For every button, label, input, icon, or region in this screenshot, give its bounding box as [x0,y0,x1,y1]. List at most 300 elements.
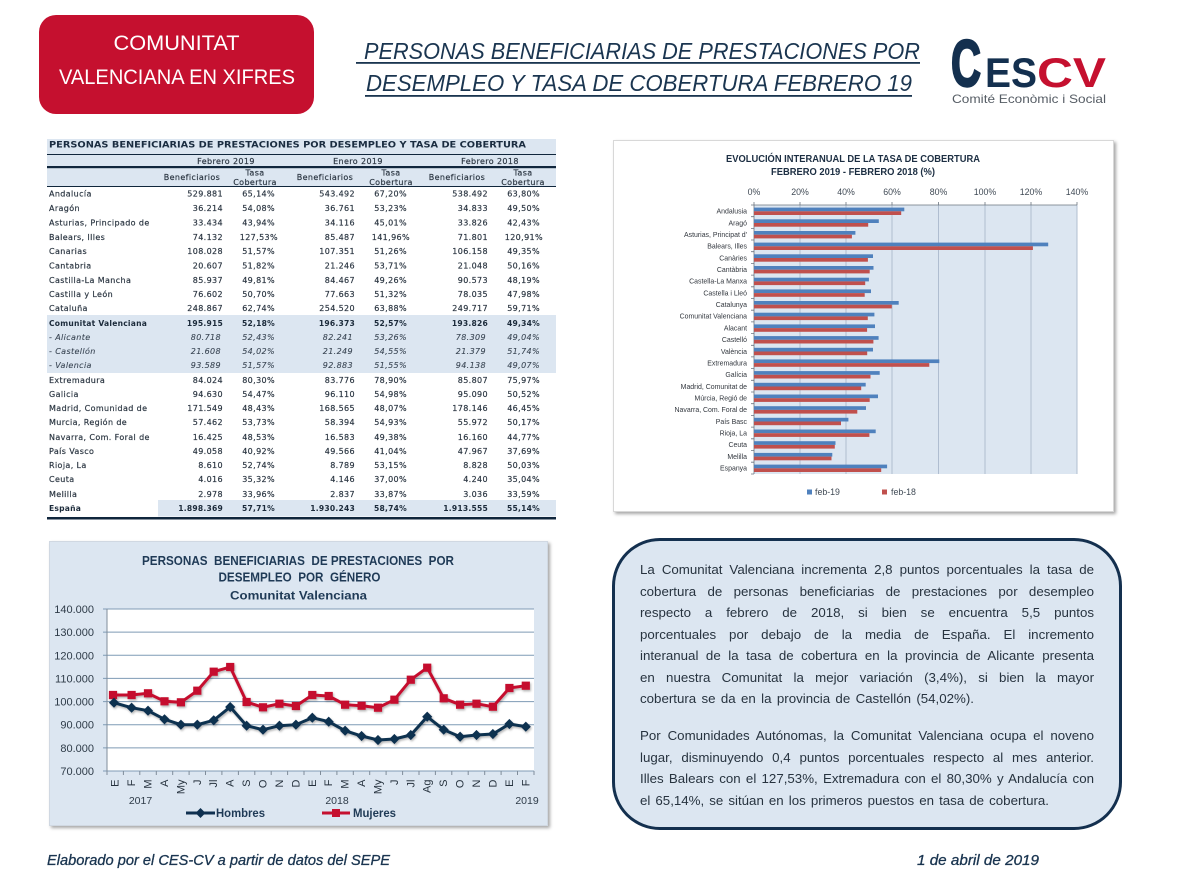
y axis labels: 70.000 [60,766,94,778]
row: España: 1.930.243 [310,504,355,513]
row: Extremadura: 78,90% [374,376,407,385]
row: Alicante: 80.718 [191,333,221,342]
row: Castellón [49,346,540,356]
paragraphs of commentary: Por Comunidades Autónomas, la Comunitat Valenciana ocupa el noveno [640,728,1094,743]
x axis month labels: S [241,780,253,787]
row: Rioja: 8.828 [463,461,488,470]
paragraphs of commentary: el 65,14%, se sitúan en los primeros puestos en tasa de cobertura. [640,792,1049,808]
row: Asturias: 42,43% [507,218,540,228]
row: País Vasco: 49.058 [193,447,223,456]
panel: coverage rate bar chart [614,140,1114,512]
row: Castilla-La Mancha: 49,81% [242,276,275,285]
row: Ceuta: 4.016 [198,475,223,484]
row: Asturias: 43,94% [242,218,275,228]
row: Rioja: 8.789 [330,461,355,470]
row: Ceuta: Ceuta [49,475,75,484]
category labels: Cantàbria [717,267,747,274]
y axis labels: 110.000 [55,673,94,685]
bar chart title [726,152,980,178]
category labels: Balears, Illes [707,244,748,251]
row: Ceuta: 37,00% [374,475,407,484]
row: Comunitat Valenciana: 52,57% [374,319,407,328]
row: Rioja: 52,74% [242,461,275,470]
x axis month labels: O [258,779,270,788]
row: España: España [49,504,81,513]
row: Comunitat Valenciana: 196.373 [319,319,355,328]
row: España: 58,74% [374,504,407,513]
row: Galicia: 54,98% [374,390,407,399]
row: Navarra [49,433,540,442]
row: Aragón: 36.761 [325,204,355,213]
row: Ceuta: 4.240 [463,475,488,484]
table column headers [164,157,545,187]
row: Melilla: 33,87% [374,490,407,499]
row: Canarias: Canarias [49,247,87,256]
row: Navarra: Navarra, Com. Foral de [49,433,150,442]
table column headers: Beneficiarios [164,173,220,182]
row: Rioja: 53,15% [374,461,407,470]
row: Castilla y León: 76.602 [193,290,223,299]
y axis labels: 80.000 [60,743,94,755]
category labels: Navarra, Com. Foral de [675,407,747,414]
table title: PERSONAS BENEFICIARIAS DE PRESTACIONES POR DESEMPLEO Y TASA DE COBERTURA [49,140,526,150]
row: Asturias: Asturias, Principado de [49,218,150,228]
row: Cantabria: 51,82% [242,262,275,270]
y axis labels: 130.000 [54,627,94,639]
paragraphs of commentary: cobertura de personas beneficiarias de prestaciones por desempleo [640,584,1094,598]
table column headers: Beneficiarios [297,173,353,182]
row: Castellón: 54,02% [242,347,275,356]
bar chart legend [807,487,916,497]
row: Murcia: 57.462 [193,418,223,427]
row: Madrid: Madrid, Comunidad de [49,404,147,413]
row: Melilla: 3.036 [463,490,488,499]
row: Canarias [49,247,540,256]
row: Galicia: 54,47% [242,390,275,399]
row: Andalucía: 65,14% [242,190,275,198]
row: Castilla-La Mancha: Castilla-La Mancha [49,276,131,285]
table column headers: Enero 2019 [333,157,383,166]
row: Valencia: 93.589 [191,361,221,370]
row: Canarias: 107.351 [319,247,355,256]
x axis month labels: O [455,779,467,788]
row: Castellón: - Castellón [49,346,96,356]
row: Rioja [49,461,540,470]
x axis month labels: F [323,779,335,786]
table column headers: Febrero 2019 [197,157,255,166]
row: País Vasco [49,447,540,456]
row: Andalucía: 67,20% [374,190,407,198]
percentage axis labels [748,187,1088,197]
footer: source: Elaborado por el CES-CV a partir de datos del SEPE [47,853,390,869]
row: Cataluña: Cataluña [49,304,88,313]
row: Cataluña: 248.867 [187,304,223,313]
row: España: 55,14% [507,504,540,513]
x axis month labels: A [225,779,237,787]
row: Extremadura: 85.807 [458,376,488,385]
row: Balears: 127,53% [240,233,278,242]
row: Navarra: 16.583 [325,433,355,442]
row: Cataluña: 59,71% [507,304,540,313]
row: Castilla y León: 50,70% [242,290,275,299]
row: Asturias: 33.434 [193,218,223,228]
percentage axis labels: 80% [930,187,947,197]
category labels: Castella-La Manxa [689,279,747,286]
y axis labels: 120.000 [54,650,94,662]
row: País Vasco: 41,04% [374,447,407,456]
paragraphs of commentary: interanual de la tasa de cobertura en la provincia de Alicante presenta [640,648,1094,663]
row: Aragón: 54,08% [242,204,275,213]
category labels: Madrid, Comunitat de [681,384,747,391]
row: Alicante: 78.309 [456,333,486,342]
x axis month labels: E [504,780,516,787]
x axis month labels: F [126,779,138,786]
row: Asturias [49,218,540,228]
row: Navarra: 48,53% [242,433,275,442]
row: País Vasco: 47.967 [458,447,488,456]
row: Canarias: 49,35% [507,247,540,256]
row: España: 1.898.369 [178,504,223,513]
table column headers: Tasa [380,168,401,178]
row: Extremadura: 83.776 [325,376,355,385]
row: Aragón: 49,50% [507,204,540,213]
x axis month labels: E [110,780,122,787]
row: Asturias: 33.826 [458,218,488,228]
category labels [675,209,748,473]
main title: DESEMPLEO Y TASA DE COBERTURA FEBRERO 19 [366,70,912,96]
row: Melilla: 33,96% [242,490,275,499]
row: Cantabria: 53,71% [374,262,407,270]
row: Navarra: 16.425 [193,433,223,442]
x axis month labels: N [471,779,483,787]
bars: feb-18 [754,211,1033,472]
row: Aragón: 36.214 [193,204,223,213]
row: Extremadura [49,376,540,385]
y axis labels: 90.000 [60,720,94,732]
line chart title: Comunitat Valenciana [230,588,367,602]
row: Castellón: 54,55% [374,347,407,356]
percentage axis labels: 40% [837,187,855,197]
logo: CESCV [951,26,1106,106]
row: Galicia: Galicia [49,390,79,399]
row: Alicante: - Alicante [49,333,91,342]
paragraphs of commentary: La Comunitat Valenciana incrementa 2,8 puntos porcentuales la tasa de [640,562,1094,577]
bar chart legend: feb-18 [891,487,916,497]
row: Balears [49,233,543,242]
row: España: 1.913.555 [443,504,488,513]
row: Galicia: 95.090 [458,390,488,399]
row: España [49,504,540,513]
category labels: València [721,349,747,356]
row: Aragón: 53,23% [374,204,407,213]
category labels: Andalusia [717,209,747,216]
header badge: Comunitat Valenciana en xifres [39,15,314,114]
logo: CESCV: ES [985,49,1037,96]
line chart legend: Mujeres [353,808,396,820]
category labels: Castelló [722,337,747,344]
bars: feb-19 [754,208,1048,468]
percentage axis labels: 20% [791,187,809,197]
row: Madrid: 178.146 [452,404,488,413]
line: Hombres [110,698,530,744]
row: Rioja: Rioja, La [49,461,87,470]
row: Balears: 85.487 [325,233,355,242]
y axis labels [54,604,94,778]
row: Madrid: 168.565 [319,404,355,413]
category labels: Múrcia, Regió de [695,396,747,402]
row: Valencia: 94.138 [456,361,486,370]
plot area and grid [103,609,534,775]
header badge: Comunitat Valenciana en xifres: VALENCIANA EN XIFRES [59,66,295,89]
row: Valencia: 49,07% [507,361,540,370]
row: País Vasco: País Vasco [49,447,94,456]
row: Rioja: 50,03% [507,461,540,470]
footer: date: 1 de abril de 2019 [917,853,1039,869]
row: Andalucía: Andalucía [49,190,92,198]
row: Murcia: Murcia, Región de [49,417,127,427]
row: Melilla: 33,59% [507,490,540,499]
table column headers: Tasa [244,168,265,178]
row: Galicia: 96.110 [325,390,355,399]
row: Cantabria: Cantabria [49,262,92,270]
year labels: 2019 [515,795,539,807]
row: Canarias: 51,26% [374,247,407,256]
row: Cataluña: 62,74% [242,304,275,313]
row: Rioja: 8.610 [198,461,223,470]
category labels: País Basc [716,419,748,426]
category labels: Alacant [724,325,747,332]
category labels: Comunitat Valenciana [680,314,747,321]
row: Melilla: 2.837 [330,490,355,499]
logo: CESCV: C [951,26,981,100]
line chart title: PERSONAS BENEFICIARIAS DE PRESTACIONES POR [142,554,454,568]
table column headers: Cobertura [233,178,277,187]
table column headers: Cobertura [369,178,413,187]
category labels: Extremadura [707,360,747,367]
row: País Vasco: 40,92% [242,447,275,456]
row: Castilla y León [49,289,540,299]
table column headers: Tasa [512,168,533,178]
category labels: Galícia [725,372,747,379]
row: Galicia: 94.630 [193,390,223,399]
row: Balears: Balears, Illes [49,233,105,242]
row: Alicante [49,333,540,342]
percentage axis labels: 100% [974,187,996,197]
table column headers: Febrero 2018 [461,157,519,166]
row: Castilla y León: 78.035 [458,290,488,299]
row: Castilla y León: Castilla y León [49,289,113,299]
x axis month labels: M [340,780,352,789]
row: Comunitat Valenciana: 193.826 [452,319,488,328]
row: País Vasco: 49.566 [325,447,355,456]
line chart title: DESEMPLEO POR GÉNERO [218,570,381,584]
x axis month labels: My [372,779,384,794]
row: Balears: 74.132 [193,233,223,242]
row: Castilla-La Mancha [49,276,540,285]
row: Murcia: 50,17% [507,418,540,427]
row: Balears: 71.801 [458,233,488,242]
x axis month labels: Jl [405,780,417,787]
row: Navarra: 49,38% [374,433,407,442]
row: Alicante: 52,43% [242,333,275,342]
row: Cantabria [49,262,540,270]
row: Comunitat Valenciana: 195.915 [187,319,223,328]
row: Andalucía: 529.881 [187,190,223,198]
row: Galicia: 50,52% [507,390,540,399]
year labels: 2017 [129,795,152,807]
row: Extremadura: 80,30% [242,376,275,385]
row: Madrid: 48,07% [374,404,407,413]
row: Castellón: 21.608 [191,347,221,356]
row: Extremadura: 84.024 [193,376,223,385]
row: Comunitat Valenciana: 49,34% [507,319,540,328]
table column headers: Cobertura [501,178,545,187]
category labels: Ceuta [728,442,747,449]
row: Valencia [49,361,540,370]
row: Balears: 141,96% [372,233,410,242]
row: Balears: 120,91% [505,233,543,242]
row: Murcia: 54,93% [374,418,407,427]
x axis month labels: Jl [208,780,220,787]
row: Cataluña [49,304,540,313]
y axis labels: 100.000 [54,697,94,709]
main title: PERSONAS BENEFICIARIAS DE PRESTACIONES POR [364,38,920,64]
category labels: Melilla [727,454,747,461]
row: Ceuta: 4.146 [330,475,355,484]
line chart legend [186,808,396,820]
row: Asturias: 45,01% [374,218,407,228]
paragraphs of commentary: cobertura se da en la provincia de Castellón (54,02%). [640,691,974,706]
row: Cantabria: 21.246 [325,262,355,270]
category labels: Castella i Lleó [703,290,747,297]
row: Castellón: 51,74% [507,347,540,356]
bar chart title: EVOLUCIÓN INTERANUAL DE LA TASA DE COBERTURA [726,152,980,165]
row: Aragón: Aragón [49,203,80,213]
table column headers: Beneficiarios [429,173,485,182]
row: Murcia: 58.394 [325,418,355,427]
row: País Vasco: 37,69% [507,447,540,456]
x axis month labels: A [159,779,171,787]
row: Castilla-La Mancha: 85.937 [193,276,223,285]
x axis month labels: J [192,780,204,785]
x axis month labels: D [290,779,302,787]
row: Canarias: 106.158 [452,247,488,256]
row: Valencia: 51,55% [374,361,407,370]
row: Comunitat Valenciana: 52,18% [242,319,275,328]
bar chart title: FEBRERO 2019 - FEBRERO 2018 (%) [771,167,935,178]
header badge: Comunitat Valenciana en xifres: COMUNITAT [114,32,240,55]
row: Comunitat Valenciana: Comunitat Valenciana [49,319,147,328]
y axis labels: 140.000 [54,604,94,616]
year labels [129,795,539,807]
category labels: Espanya [720,466,747,473]
row: Castilla-La Mancha: 90.573 [458,276,488,285]
row: Castilla-La Mancha: 49,26% [374,276,407,285]
row: Valencia: 51,57% [242,361,275,370]
row: Castilla y León: 47,98% [507,290,540,299]
line chart title [142,554,454,602]
row: Castilla y León: 51,32% [374,290,407,299]
row: Valencia: 92.883 [323,361,353,370]
paragraphs of commentary: respecto a febrero de 2018, si bien se encuentra 5,5 puntos [640,605,1094,620]
row: España: 57,71% [242,504,275,513]
paragraphs of commentary: lugar, disminuyendo 0,4 puntos porcentuales respecto al mes anterior. [640,750,1094,764]
row: Melilla [49,490,540,499]
row: Extremadura: 75,97% [507,376,540,385]
row: Madrid: 46,45% [507,404,540,413]
row: Murcia: 53,73% [242,418,275,427]
row: Valencia: - Valencia [49,361,92,370]
row: Andalucía: 63,80% [507,190,540,198]
panel: commentary text box [612,538,1122,830]
row: Melilla: 2.978 [198,490,223,499]
panel: line chart by gender [50,542,548,826]
row: Cantabria: 21.048 [458,262,488,270]
row: Alicante: 53,26% [374,333,407,342]
row: Cataluña: 254.520 [319,304,355,313]
x axis month labels: S [438,780,450,787]
x axis month labels: E [307,780,319,787]
plot background and grid [751,202,1077,474]
bar chart legend: feb-19 [815,487,840,497]
row: Cataluña: 249.717 [452,304,488,313]
row: Comunitat Valenciana [49,319,540,328]
row: Ceuta: 35,32% [242,475,275,484]
row: Aragón [49,203,540,213]
x axis month labels: My [175,779,187,794]
logo: CESCV: CV [1037,49,1106,96]
category labels: Catalunya [716,302,747,309]
category labels: Canàries [719,255,748,262]
category labels: Rioja, La [720,430,747,438]
row: Castellón: 21.249 [323,347,353,356]
x axis month labels: J [389,780,401,785]
row: Asturias: 34.116 [325,218,355,228]
row: Ceuta: 35,04% [507,475,540,484]
percentage axis labels: 60% [883,187,901,197]
x axis month labels: A [356,779,368,787]
percentage axis labels: 0% [748,187,761,197]
row: Murcia: 55.972 [458,418,488,427]
row: Madrid: 48,43% [242,404,275,413]
x axis month labels [110,779,532,794]
row: Galicia [49,390,540,399]
category labels: Aragó [728,220,747,227]
x axis month labels: F [520,779,532,786]
row: Castellón: 21.379 [456,347,486,356]
main title [356,38,920,97]
line: Mujeres [110,664,529,711]
row: Murcia [49,417,540,427]
row: Andalucía: 543.492 [319,190,355,198]
row: Navarra: 16.160 [458,433,488,442]
x axis month labels: N [274,779,286,787]
x axis month labels: Ag [422,780,434,793]
percentage axis labels: 120% [1020,187,1042,197]
row: Castilla y León: 77.663 [325,290,355,299]
row: Madrid: 171.549 [187,404,223,413]
row: Madrid [49,404,540,413]
row: Canarias: 108.028 [187,247,223,256]
row: Andalucía: 538.492 [452,190,488,198]
x axis month labels: M [142,780,154,789]
row: Cantabria: 20.607 [193,262,223,270]
row: Ceuta [49,475,540,484]
row: Aragón: 34.833 [458,204,488,213]
logo: CESCV: Comité Econòmic i Social [952,92,1106,106]
row: Cantabria: 50,16% [507,262,540,270]
line chart legend: Hombres [216,808,265,820]
